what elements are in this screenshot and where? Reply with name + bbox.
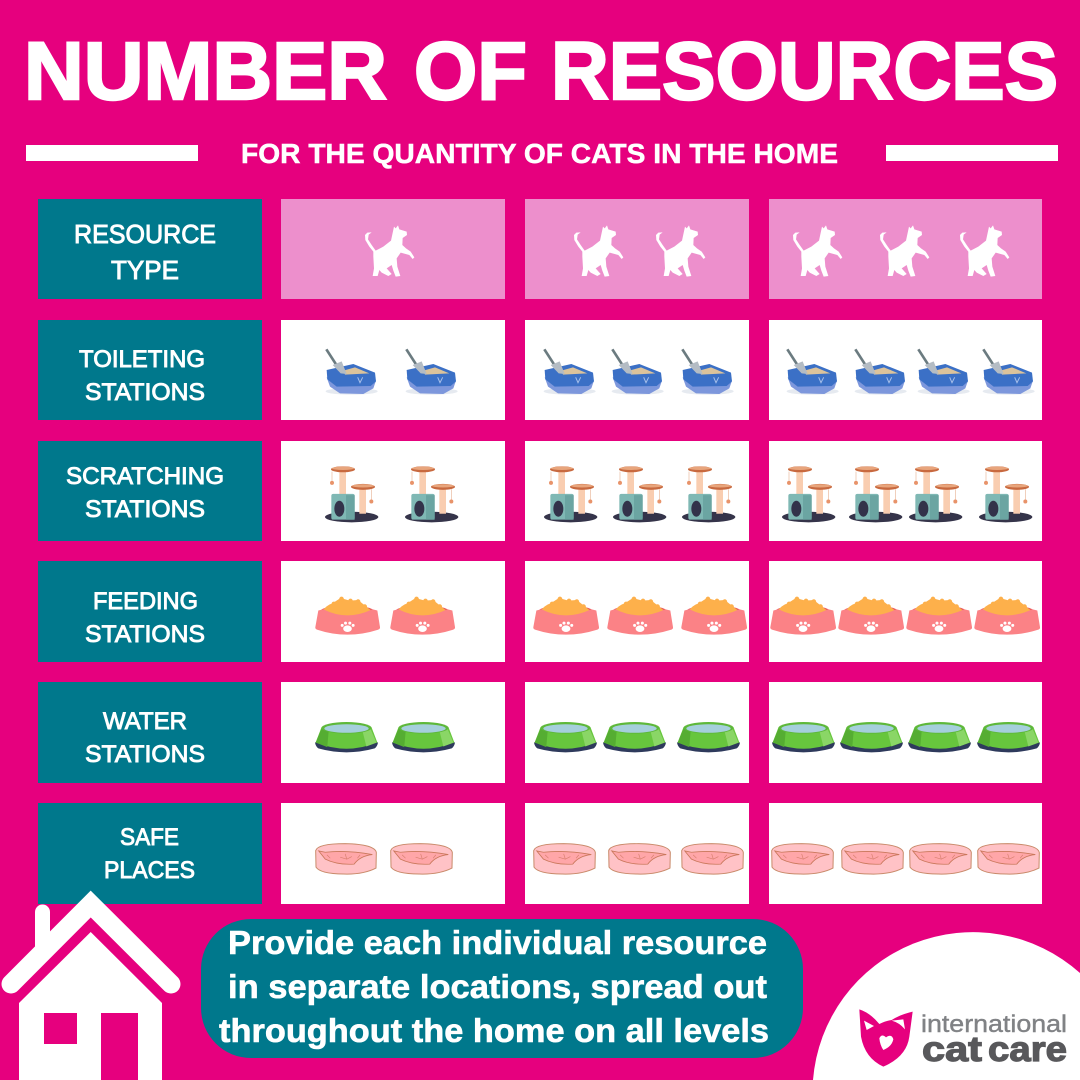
callout: advice pill (201, 919, 803, 1058)
label: scratching stations: SCRATCHING (66, 463, 224, 490)
title (24, 26, 1058, 117)
label: water stations (38, 682, 262, 783)
three litter trays (525, 320, 749, 420)
four food bowls (769, 561, 1042, 662)
row label: resource type (38, 199, 262, 299)
callout: advice pill: in separate locations, spread out (228, 968, 767, 1005)
label: water stations: STATIONS (85, 741, 205, 768)
three scratching posts (525, 441, 749, 541)
logo: international cat care (813, 932, 1080, 1080)
label: feeding stations (38, 561, 262, 662)
label: scratching stations (38, 441, 262, 541)
row: water stations (38, 682, 1042, 783)
row: safe places (38, 803, 1042, 904)
row: feeding stations (38, 561, 1042, 662)
four water bowls (769, 682, 1042, 783)
title: RESOURCES (551, 26, 1058, 117)
two litter trays (281, 320, 505, 420)
callout: advice pill: Provide each individual resource (228, 924, 767, 961)
four beds (769, 803, 1042, 904)
two scratching posts (281, 441, 505, 541)
three food bowls (525, 561, 749, 662)
title: OF (414, 26, 527, 117)
subtitle with side rules (26, 138, 1058, 169)
row label: resource type: TYPE (111, 255, 179, 285)
label: toileting stations: TOILETING (79, 346, 205, 373)
label: safe places: PLACES (104, 857, 195, 884)
three water bowls (525, 682, 749, 783)
callout: advice pill: throughout the home on all levels (219, 1012, 769, 1049)
header row: resource type and cat counts (38, 199, 1042, 299)
logo: international cat care: international (921, 1011, 1067, 1038)
three cats column (769, 199, 1042, 299)
logo mark: cat heart (859, 1009, 913, 1067)
two cats column (525, 199, 749, 299)
label: toileting stations (38, 320, 262, 420)
label: safe places: SAFE (120, 824, 179, 851)
two beds (281, 803, 505, 904)
label: feeding stations: STATIONS (85, 621, 205, 648)
label: feeding stations: FEEDING (93, 588, 198, 615)
two water bowls (281, 682, 505, 783)
four scratching posts (769, 441, 1042, 541)
row label: resource type: RESOURCE (74, 219, 216, 249)
subtitle with side rules: FOR THE QUANTITY OF CATS IN THE HOME (241, 138, 838, 169)
label: water stations: WATER (103, 708, 187, 735)
row: scratching stations (38, 441, 1042, 541)
label: safe places (38, 803, 262, 904)
logo: international cat care: cat (922, 1030, 982, 1069)
three beds (525, 803, 749, 904)
icon: house (11, 904, 171, 1080)
title: NUMBER (24, 26, 387, 117)
row: toileting stations (38, 320, 1042, 420)
two food bowls (281, 561, 505, 662)
label: scratching stations: STATIONS (85, 496, 205, 523)
logo: international cat care: care (988, 1030, 1067, 1069)
one cat column (281, 199, 505, 299)
four litter trays (769, 320, 1042, 420)
label: toileting stations: STATIONS (85, 379, 205, 406)
